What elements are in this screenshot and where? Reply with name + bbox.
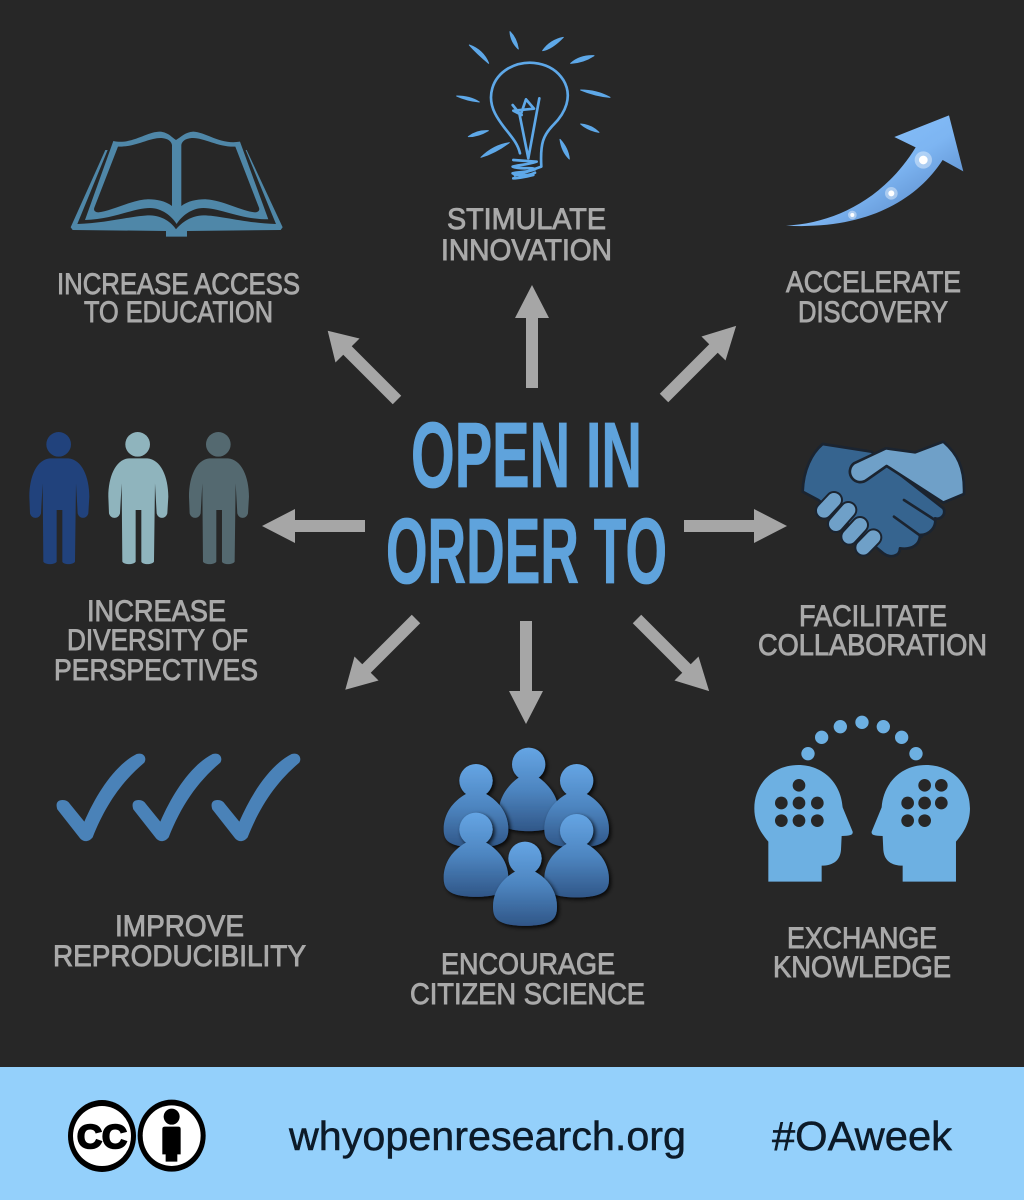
label: increase diversity of perspectives: [54, 595, 258, 687]
arrow: up: [515, 285, 549, 388]
label: improve reproducibility: REPRODUCIBILITY: [53, 940, 306, 973]
label: exchange knowledge: EXCHANGE: [787, 922, 937, 955]
arrow: right: [684, 509, 787, 543]
label: stimulate innovation: [441, 203, 612, 267]
icon: three check marks: [57, 754, 300, 841]
icon: creative commons cc: [68, 1100, 136, 1172]
label: exchange knowledge: [773, 922, 951, 984]
label: accelerate discovery: ACCELERATE: [786, 266, 961, 299]
icon: light bulb: [457, 32, 610, 178]
label: increase access to education: INCREASE ACCESS: [57, 268, 300, 301]
label: encourage citizen science: ENCOURAGE: [441, 948, 615, 981]
label: accelerate discovery: [786, 266, 961, 329]
label: improve reproducibility: [53, 910, 306, 973]
label: improve reproducibility: IMPROVE: [115, 910, 244, 943]
label: exchange knowledge: KNOWLEDGE: [773, 951, 951, 984]
label: accelerate discovery: DISCOVERY: [798, 296, 948, 329]
label: encourage citizen science: [410, 948, 645, 1011]
title: open in order to: [386, 403, 667, 603]
label: facilitate collaboration: COLLABORATION: [758, 629, 987, 662]
label: stimulate innovation: INNOVATION: [441, 234, 612, 267]
arrow: down right: [625, 607, 721, 703]
icon: open book: [71, 132, 283, 237]
arrow: left: [262, 509, 365, 543]
icon: three people: [29, 432, 249, 564]
label: increase diversity of perspectives: PERSPECTIVES: [54, 654, 258, 687]
title: open in order to: OPEN IN: [411, 403, 642, 507]
icon: rising arrow: [786, 115, 963, 226]
icon: creative commons attribution: [138, 1100, 206, 1172]
icon: two heads exchanging knowledge: [754, 716, 970, 882]
footer band: [0, 1067, 1024, 1200]
arrow: up left: [316, 319, 409, 412]
icon: crowd of people: [444, 748, 609, 926]
label: increase access to education: TO EDUCATION: [84, 296, 273, 329]
label: increase diversity of perspectives: DIVERSITY OF: [67, 624, 248, 657]
arrow: down: [509, 621, 543, 724]
arrow: down left: [333, 607, 428, 702]
footer hashtag: #OAweek: [772, 1113, 953, 1159]
label: increase access to education: [57, 268, 300, 329]
arrow: up right: [652, 314, 748, 410]
label: increase diversity of perspectives: INCREASE: [87, 595, 226, 628]
label: facilitate collaboration: FACILITATE: [799, 600, 947, 633]
icon: creative commons cc: CC: [77, 1118, 127, 1155]
label: facilitate collaboration: [758, 600, 987, 662]
icon: handshake: [803, 442, 964, 556]
label: stimulate innovation: STIMULATE: [447, 203, 606, 236]
footer url: whyopenresearch.org: [288, 1113, 686, 1159]
label: encourage citizen science: CITIZEN SCIENCE: [410, 978, 645, 1011]
title: open in order to: ORDER TO: [386, 499, 667, 603]
